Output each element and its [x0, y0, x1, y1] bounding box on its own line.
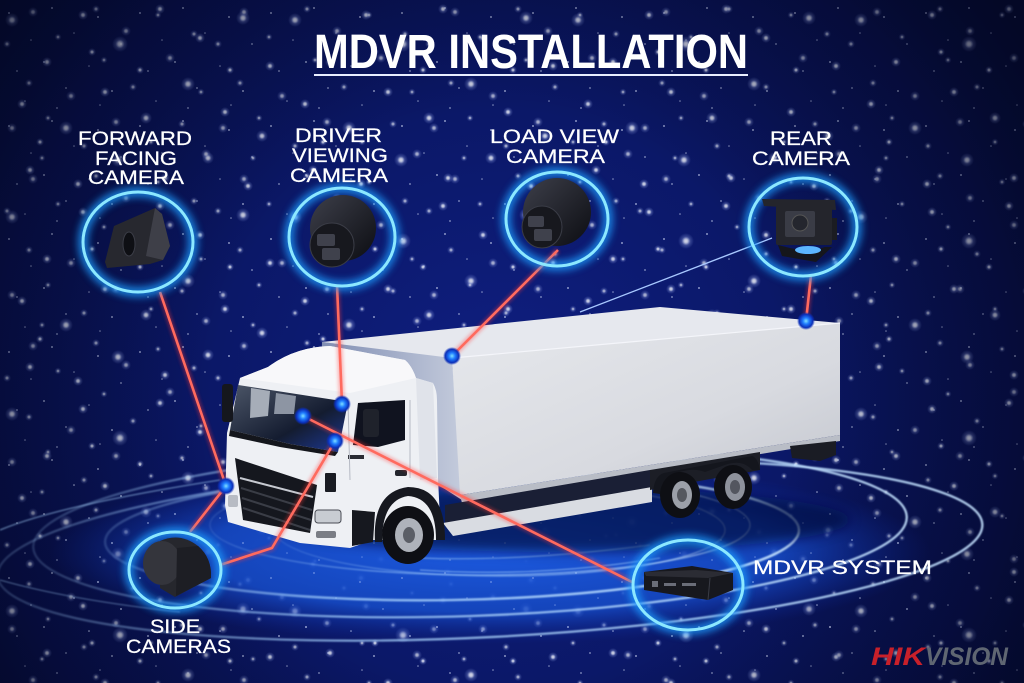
label: rear camera	[752, 129, 850, 170]
label: rear camera: REAR	[770, 129, 832, 150]
camera body	[105, 208, 170, 268]
label: load view camera: LOAD VIEW	[490, 127, 619, 148]
ring	[749, 178, 857, 276]
label: driver viewing camera: DRIVER	[295, 126, 382, 147]
cargo box	[320, 307, 840, 503]
label: driver viewing camera: CAMERA	[290, 166, 388, 187]
thin white link line	[580, 238, 772, 312]
label: rear camera: CAMERA	[752, 149, 850, 170]
windscreen	[230, 385, 348, 452]
label: side cameras	[126, 617, 231, 658]
red connection lines	[160, 250, 811, 583]
ring	[289, 188, 395, 286]
label: MDVR system: MDVR SYSTEM	[753, 558, 932, 579]
label: driver viewing camera: VIEWING	[292, 146, 388, 167]
recorder box	[644, 566, 733, 600]
dome camera	[522, 178, 591, 248]
rear camera	[749, 178, 857, 276]
label: forward facing camera: FACING	[95, 149, 177, 170]
label: load view camera	[490, 127, 619, 168]
ring	[129, 532, 221, 608]
cab body	[222, 346, 445, 548]
label: driver viewing camera	[290, 126, 388, 187]
logo: Hikvision	[871, 643, 1009, 671]
forward facing camera	[83, 192, 193, 292]
truck shadow	[270, 488, 850, 552]
label: side cameras: SIDE	[150, 617, 200, 638]
chassis	[443, 441, 836, 536]
floor: glowing concentric signal ripples	[0, 433, 987, 663]
MDVR unit	[633, 540, 743, 630]
label: forward facing camera: FORWARD	[78, 129, 192, 150]
ring	[633, 540, 743, 630]
logo: Hikvision: HIK	[871, 643, 927, 671]
wheel arch	[352, 510, 375, 546]
label: forward facing camera	[78, 129, 192, 189]
front wheel	[382, 506, 434, 564]
rear wheels	[660, 465, 752, 518]
label: forward facing camera: CAMERA	[88, 168, 184, 189]
headlamp	[315, 510, 341, 523]
door window	[353, 400, 405, 447]
box camera	[762, 199, 837, 262]
logo: Hikvision: VISION	[925, 643, 1009, 671]
title: MDVR INSTALLATION	[314, 26, 748, 79]
camera body	[143, 537, 211, 597]
load view camera	[506, 172, 608, 266]
truck	[222, 307, 850, 564]
ring	[506, 172, 608, 266]
connection nodes	[217, 312, 815, 495]
driver viewing camera	[289, 188, 395, 286]
label: load view camera: CAMERA	[506, 147, 605, 168]
side camera	[129, 532, 221, 608]
door seam and handle	[348, 400, 410, 480]
ring	[83, 192, 193, 292]
side mirror	[222, 384, 233, 422]
grille	[235, 458, 317, 533]
dome camera	[310, 195, 376, 267]
side vent	[325, 473, 336, 492]
label: side cameras: CAMERAS	[126, 637, 231, 658]
